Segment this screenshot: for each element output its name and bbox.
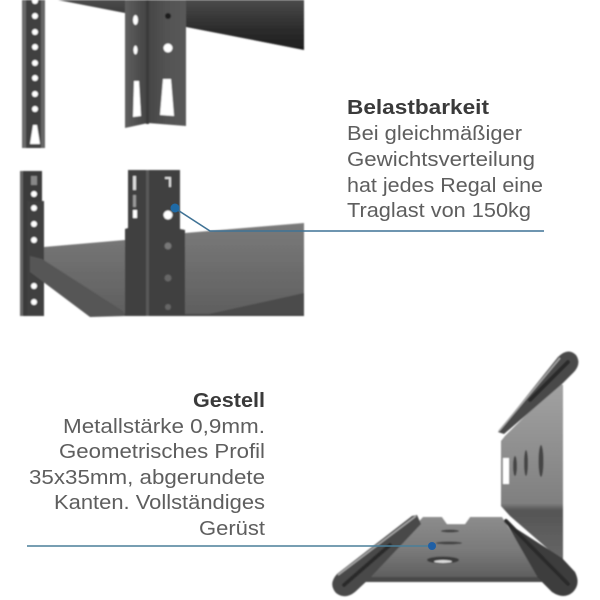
text block: Gestell: Kanten. Vollständiges xyxy=(54,492,265,514)
text block: Belastbarkeit: Belastbarkeit xyxy=(347,97,489,119)
text block: Belastbarkeit: hat jedes Regal eine xyxy=(347,175,543,197)
text block: Gestell xyxy=(29,390,265,540)
side beam xyxy=(30,256,125,317)
middle upright post xyxy=(125,0,186,128)
text block: Gestell: Gerüst xyxy=(199,518,265,540)
text block: Gestell: Gestell xyxy=(193,390,265,412)
bracket profile illustration xyxy=(332,351,578,596)
shelf panel xyxy=(44,223,304,316)
text block: Gestell: Geometrisches Profil xyxy=(59,441,265,463)
text block: Belastbarkeit: Bei gleichmäßiger xyxy=(347,123,522,145)
leader line: Gestell xyxy=(27,542,436,550)
left upright post xyxy=(22,0,45,148)
left upright post xyxy=(20,171,44,316)
text block: Gestell: 35x35mm, abgerundete xyxy=(29,467,265,489)
text block: Belastbarkeit: Traglast von 150kg xyxy=(347,200,531,222)
text block: Belastbarkeit: Gewichtsverteilung xyxy=(347,149,535,171)
text block: Belastbarkeit xyxy=(347,97,543,222)
leader line: Belastbarkeit xyxy=(170,204,544,231)
text block: Gestell: Metallstärke 0,9mm. xyxy=(63,416,265,438)
rolled edge: bottom left xyxy=(332,515,421,596)
vertical wall xyxy=(501,383,563,560)
shelf beam xyxy=(58,0,304,50)
photo: upper shelf detail xyxy=(22,0,304,148)
bottom plate xyxy=(365,517,562,582)
rolled edge: top right xyxy=(498,351,578,434)
rolled edge: bottom right xyxy=(504,519,578,596)
middle upright post xyxy=(125,170,185,316)
photo: lower shelf detail xyxy=(20,170,304,317)
